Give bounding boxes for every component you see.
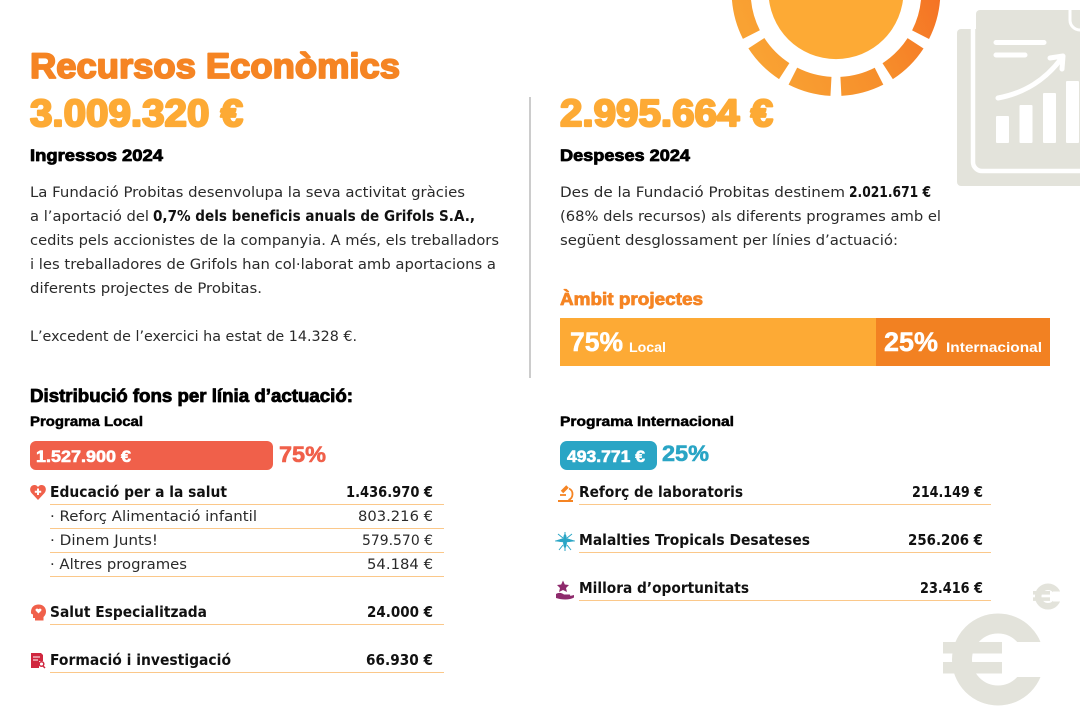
row: training and research bbox=[50, 651, 444, 672]
local amount bar: 1.527.900 € bbox=[36, 448, 131, 466]
row: child nutrition: · Reforç Alimentació infantil bbox=[50, 509, 257, 525]
row: specialised health: Salut Especialitzada bbox=[50, 603, 207, 621]
icon: heart with cross bbox=[30, 485, 46, 500]
income description: La Fundació Probitas desenvolupa la seva activitat gràcies bbox=[30, 185, 465, 201]
row: improving opportunities: Millora d’oportunitats bbox=[579, 579, 749, 597]
income description: L’excedent de l’exercici ha estat de 14.328 €. bbox=[30, 329, 357, 345]
row: health education: 1.436.970 € bbox=[346, 483, 433, 501]
row: child nutrition: 803.216 € bbox=[358, 509, 433, 525]
row: other programmes bbox=[50, 557, 444, 576]
title: Recursos Econòmics bbox=[30, 47, 400, 86]
row: training and research: Formació i investigació bbox=[50, 651, 231, 669]
row: laboratory reinforcement bbox=[579, 483, 991, 504]
income description: 0,7% dels beneficis anuals de Grifols S.A., bbox=[153, 207, 475, 225]
row: improving opportunities bbox=[579, 579, 991, 600]
international percentage: 25% bbox=[662, 441, 709, 466]
international amount bar bbox=[560, 441, 657, 470]
expenses description: (68% dels recursos) als diferents programes amb el bbox=[560, 209, 941, 225]
local programme heading: Programa Local bbox=[30, 413, 143, 429]
income description: a l’aportació del bbox=[30, 209, 149, 225]
icon: large euro decoration bbox=[943, 624, 1052, 696]
stacked bar: project scope: Local bbox=[629, 340, 666, 355]
international amount bar: 493.771 € bbox=[567, 448, 645, 466]
row: training and research: 66.930 € bbox=[366, 651, 433, 669]
stacked bar: project scope: 75% bbox=[570, 327, 623, 357]
stacked bar: project scope: Internacional bbox=[946, 340, 1042, 355]
panel: international programme bbox=[555, 413, 991, 600]
icon: sun decoration bbox=[741, 0, 931, 86]
expenses total: 2.995.664 € bbox=[560, 93, 773, 135]
expenses heading: Despeses 2024 bbox=[560, 147, 691, 165]
income description bbox=[30, 185, 499, 345]
stacked bar: project scope: 25% bbox=[884, 327, 938, 357]
row: neglected tropical diseases: 256.206 € bbox=[908, 531, 983, 549]
icon: mosquito bbox=[555, 532, 575, 551]
row: other programmes: · Altres programes bbox=[50, 557, 187, 573]
stacked bar: project scope bbox=[560, 318, 1050, 366]
icon: hand with star bbox=[556, 580, 574, 599]
local amount bar bbox=[30, 441, 273, 470]
expenses description: 2.021.671 € bbox=[849, 183, 931, 201]
expenses description: següent desglossament per línies d’actuació: bbox=[560, 233, 898, 249]
row: neglected tropical diseases bbox=[579, 531, 991, 552]
row: other programmes: 54.184 € bbox=[367, 557, 433, 573]
local percentage: 75% bbox=[279, 442, 326, 467]
income description: cedits pels accionistes de la companyia. A més, els treballadors bbox=[30, 233, 499, 249]
row: specialised health: 24.000 € bbox=[367, 603, 433, 621]
panel: local programme bbox=[30, 413, 444, 672]
row: neglected tropical diseases: Malalties Tropicals Desateses bbox=[579, 531, 810, 549]
row: health education: Educació per a la salut bbox=[50, 483, 227, 501]
expenses description: Des de la Fundació Probitas destinem bbox=[560, 185, 845, 201]
column divider bbox=[529, 97, 531, 378]
international programme heading: Programa Internacional bbox=[560, 413, 734, 429]
expenses description bbox=[560, 183, 941, 249]
icon: head with heart bbox=[31, 604, 46, 620]
row: Dinem Junts: · Dinem Junts! bbox=[50, 533, 158, 549]
row: laboratory reinforcement: Reforç de laboratoris bbox=[579, 483, 743, 501]
row: specialised health bbox=[50, 603, 444, 624]
income description: diferents projectes de Probitas. bbox=[30, 281, 262, 297]
icon: document with magnifier bbox=[31, 653, 45, 668]
row: laboratory reinforcement: 214.149 € bbox=[912, 483, 983, 501]
icon: microscope bbox=[558, 486, 573, 501]
row: Dinem Junts bbox=[50, 533, 444, 552]
row: Dinem Junts: 579.570 € bbox=[362, 533, 433, 549]
icon: small euro decoration bbox=[1033, 587, 1063, 606]
income total: 3.009.320 € bbox=[30, 93, 243, 135]
row: improving opportunities: 23.416 € bbox=[920, 579, 983, 597]
icon: financial report decoration bbox=[957, 8, 1080, 186]
row: child nutrition bbox=[50, 509, 444, 528]
distribution heading: Distribució fons per línia d’actuació: bbox=[30, 386, 353, 406]
income description: i les treballadores de Grifols han col·laborat amb aportacions a bbox=[30, 257, 496, 273]
project scope heading: Àmbit projectes bbox=[560, 288, 703, 309]
income heading: Ingressos 2024 bbox=[30, 147, 164, 165]
row: health education bbox=[50, 483, 444, 504]
